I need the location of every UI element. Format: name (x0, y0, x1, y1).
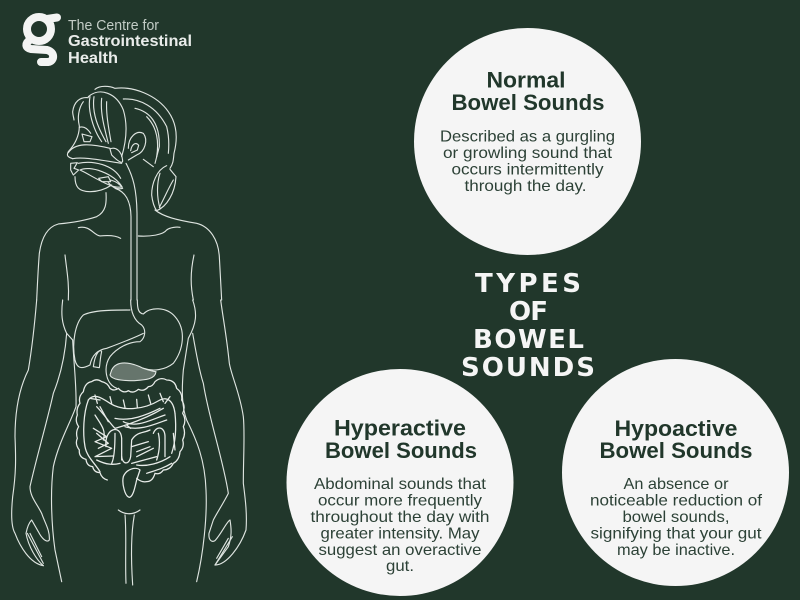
logo wordmark: The Centre for (68, 18, 159, 34)
text: normal description: occurs intermittently (452, 162, 604, 178)
text: hypoactive description: An absence or (624, 476, 729, 493)
text: hypoactive description: bowel sounds, (622, 509, 730, 526)
torso and arms (12, 300, 246, 585)
logo (26, 17, 192, 67)
logo wordmark (68, 18, 192, 67)
title: TYPES (475, 269, 581, 299)
text: hyperactive description: suggest an overactive (318, 542, 482, 559)
heading: hyperactive: Hyperactive (334, 416, 466, 440)
text: hypoactive description: noticeable reduction of (590, 492, 763, 510)
text: hyperactive description: gut. (386, 558, 414, 575)
stomach, liver and pancreas (74, 300, 182, 388)
title: SOUNDS (461, 353, 595, 383)
text: hypoactive description: may be inactive. (617, 542, 735, 559)
text: hyperactive description (310, 476, 490, 575)
panel: hypoactive bowel sounds (562, 359, 789, 586)
text: hypoactive description (590, 476, 763, 559)
title: OF (509, 297, 548, 327)
title: BOWEL (473, 325, 584, 355)
panel: hyperactive bowel sounds (286, 369, 514, 596)
heading: hypoactive: Bowel Sounds (600, 438, 752, 463)
heading: hypoactive (600, 416, 752, 463)
text: normal description: through the day. (464, 178, 586, 195)
logo wordmark: Health (68, 50, 118, 67)
title (461, 269, 595, 383)
head, neck and shoulders (37, 86, 222, 300)
heading: normal: Normal (486, 68, 566, 92)
text: hyperactive description: Abdominal sounds that (314, 476, 487, 493)
panel: normal bowel sounds (414, 28, 641, 255)
heading: normal: Bowel Sounds (452, 90, 604, 115)
heading: hypoactive: Hypoactive (614, 416, 738, 441)
text: normal description: Described as a gurgling (440, 128, 615, 146)
heading: hyperactive (325, 416, 477, 463)
illustration: female body with digestive system (12, 86, 246, 585)
text: hyperactive description: throughout the day with (310, 509, 490, 526)
heading: normal (452, 68, 604, 115)
logo wordmark: Gastrointestinal (68, 33, 192, 50)
icon: g monogram (26, 17, 57, 62)
text: hyperactive description: occur more frequently (318, 492, 482, 510)
text: hyperactive description: greater intensity. May (320, 526, 480, 542)
intestines (76, 379, 185, 497)
heading: hyperactive: Bowel Sounds (325, 438, 477, 463)
text: normal description: or growling sound that (443, 145, 613, 162)
text: normal description (440, 128, 615, 195)
text: hypoactive description: signifying that your gut (590, 526, 762, 542)
